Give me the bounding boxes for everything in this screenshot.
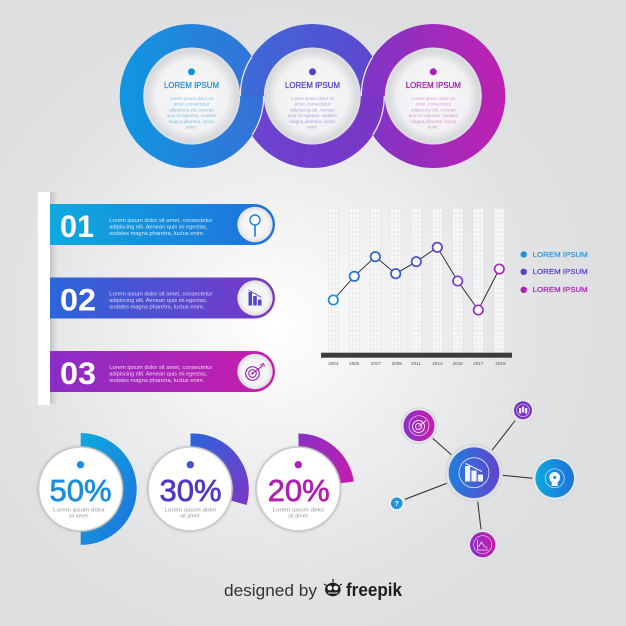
dial 20%: 20% [268, 473, 330, 508]
connector lines [405, 421, 533, 529]
chart legend: LOREM IPSUM [533, 250, 588, 259]
icon: freepik logo [324, 579, 342, 596]
banner 03 [50, 351, 275, 392]
chart year labels [328, 361, 506, 366]
card: circle 1: enim. [186, 124, 197, 130]
icon: magnifier [250, 215, 260, 237]
icon: bar chart [248, 290, 262, 306]
banner 01: sodales magna pharetra, luctus enim. [109, 231, 204, 237]
dial 30%: Lorem ipsum dolor [164, 508, 217, 514]
card: circle 1: magna pharetra, luctus [168, 119, 215, 124]
panel: numbered list [38, 192, 275, 405]
panel: line chart [321, 208, 588, 366]
card: circle 1: amet, consectetur [174, 102, 210, 107]
banner 02 [50, 278, 275, 318]
banner 03: Lorem ipsum dolor sit amet, consectetur [109, 365, 213, 371]
node: help: ? [395, 501, 399, 508]
dial 30% [148, 433, 249, 531]
panel: percentage dials [38, 433, 354, 545]
card: circle 3: adipiscing elit. Aenean [411, 107, 456, 112]
chart year labels: 2011 [411, 361, 421, 366]
card: circle 3: magna pharetra, luctus [410, 119, 457, 124]
chart year labels: 2015 [453, 361, 463, 366]
node: target [401, 408, 437, 444]
dial 20%: Lorem ipsum dolor [272, 508, 325, 514]
card: circle 2: amet, consectetur [295, 102, 331, 107]
chart baseline [321, 353, 512, 358]
panel: network diagram [388, 398, 577, 560]
dial 30%: 30% [159, 473, 222, 508]
node: area chart [468, 530, 498, 560]
chart legend [520, 250, 588, 294]
card: circle 2: enim. [307, 124, 318, 130]
card: circle 1 [143, 48, 240, 144]
chart legend: LOREM IPSUM [533, 285, 588, 294]
chart line [333, 247, 499, 310]
chart year labels: 2005 [349, 361, 360, 366]
card: circle 2: magna pharetra, luctus [289, 119, 336, 124]
banner 01 [50, 204, 275, 245]
banner 02: sodales magna pharetra, luctus enim. [109, 304, 204, 310]
banner 02: Lorem ipsum dolor sit amet, consectetur [109, 292, 213, 298]
banner 03: 03 [60, 355, 96, 391]
node: help [388, 495, 405, 512]
card: circle 3: quis mi egestas, sodales [409, 113, 459, 118]
card: circle 3: amet, consectetur [415, 102, 452, 107]
banner 01: Lorem ipsum dolor sit amet, consectetur [109, 218, 213, 224]
card: circle 2: adipiscing elit. Aenean [290, 107, 335, 112]
banner 01: adipiscing elit. Aenean quis mi egestas, [109, 224, 207, 230]
chart columns [328, 208, 504, 352]
footer: freepik credit: freepik [346, 580, 403, 600]
chart year labels: 2019 [495, 361, 506, 366]
card: circle 1: Lorem ipsum dolor sit [170, 96, 214, 101]
card: circle 2: quis mi egestas, sodales [288, 113, 338, 118]
dial 30%: sit amet. [180, 513, 201, 519]
dial 50%: 50% [49, 473, 112, 508]
card: circle 2: Lorem ipsum dolor sit [291, 96, 335, 101]
card: circle 1: adipiscing elit. Aenean [169, 107, 214, 112]
chart year labels: 2003 [328, 361, 339, 366]
card: circle 1: quis mi egestas, sodales [167, 113, 217, 118]
chart year labels: 2007 [371, 361, 382, 366]
chart points [329, 243, 504, 315]
footer: freepik credit: designed by [224, 581, 318, 600]
panel: linked circles [132, 36, 493, 156]
chart year labels: 2009 [392, 361, 402, 366]
chart year labels: 2013 [432, 361, 443, 366]
card: circle 3: LOREM IPSUM [406, 81, 461, 90]
dial 20% [256, 434, 354, 531]
hub node [446, 444, 502, 501]
banner 02: adipiscing elit. Aenean quis mi egestas, [109, 298, 207, 304]
card: circle 3: enim. [428, 124, 439, 130]
card: circle 1: LOREM IPSUM [164, 81, 219, 90]
banner 02: 02 [60, 281, 96, 317]
card: circle 3 [385, 48, 482, 144]
vertical white bar [38, 192, 58, 405]
banner 03: adipiscing elit. Aenean quis mi egestas, [109, 371, 207, 377]
dial 50% [38, 433, 137, 545]
dial 50%: sit amet. [69, 513, 90, 519]
card: circle 2: LOREM IPSUM [285, 81, 340, 90]
chart year labels: 2017 [473, 361, 484, 366]
node: people [511, 398, 535, 422]
banner 01: 01 [60, 208, 94, 244]
card: circle 3: Lorem ipsum dolor sit [412, 96, 456, 101]
dial 20%: sit amet. [288, 513, 309, 519]
banner 03: sodales magna pharetra, luctus enim. [109, 378, 204, 384]
icon: target [246, 364, 264, 380]
chart legend: LOREM IPSUM [533, 267, 588, 276]
card: circle 2 [264, 48, 361, 144]
ring segments [132, 36, 493, 156]
footer: freepik credit [224, 579, 403, 600]
node: light bulb [533, 456, 577, 500]
dial 50%: Lorem ipsum dolor [53, 508, 105, 514]
